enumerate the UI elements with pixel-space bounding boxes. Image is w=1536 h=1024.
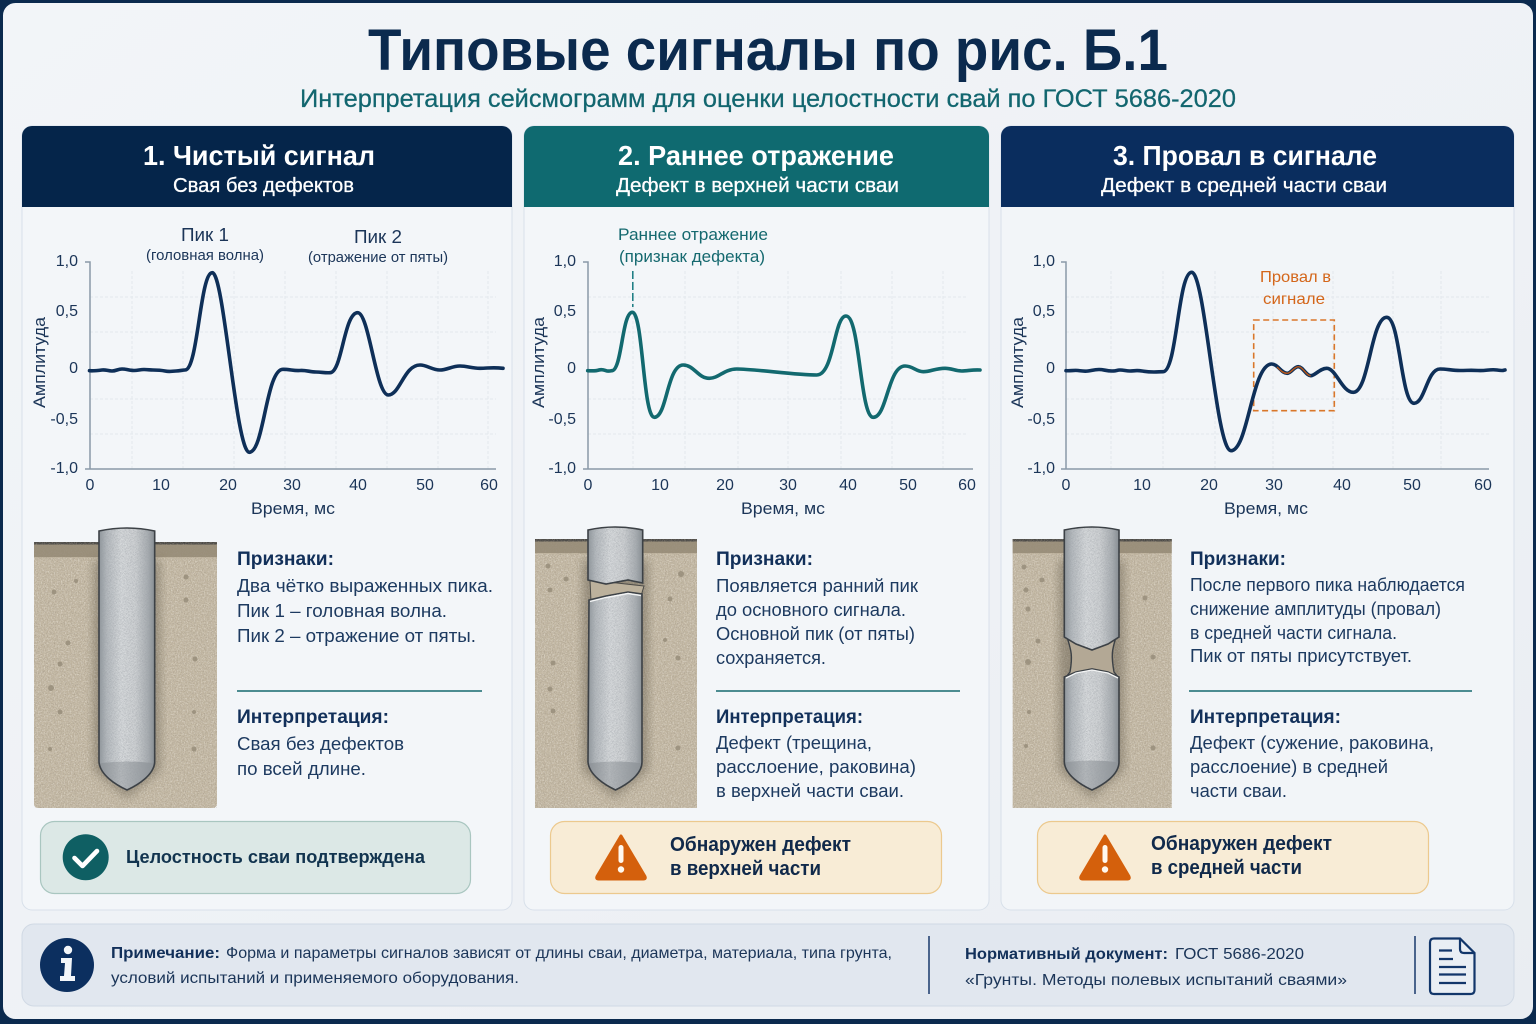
text: interpretation: [1190, 707, 1434, 801]
text: signs: до основного сигнала.: [716, 600, 906, 620]
panel 2 header: 2. Раннее отражение: [618, 140, 894, 171]
panel: 3 signal dip: [1001, 126, 1514, 910]
normative document text: ГОСТ 5686-2020: [1175, 946, 1304, 963]
chart: signal dip seismogram: Провал в: [1260, 269, 1331, 286]
note text: Форма и параметры сигналов зависят от длины сваи, диаметра, материала, типа грунта,: [226, 945, 892, 962]
panel 2 header: Дефект в верхней части сваи: [616, 175, 899, 197]
text: interpretation: Интерпретация:: [716, 707, 863, 728]
status: defect in middle part: в средней части: [1151, 857, 1302, 879]
chart: signal dip seismogram: 1,0: [1033, 253, 1055, 270]
chart: early reflection seismogram: 30: [779, 477, 797, 494]
chart: clean signal seismogram: Пик 2: [354, 227, 402, 247]
status: defect in middle part: Обнаружен дефект: [1151, 833, 1332, 855]
icon: check mark: [63, 834, 109, 880]
icon: warning: [1081, 836, 1129, 879]
illustration: pile with crack in upper part: [535, 524, 697, 808]
panel: 1 clean signal: [22, 126, 512, 910]
text: signs: Два чётко выраженных пика.: [237, 576, 493, 596]
chart: clean signal seismogram: -1,0: [50, 460, 78, 477]
chart: clean signal seismogram: 50: [416, 477, 434, 494]
chart: early reflection seismogram: [529, 226, 980, 518]
text: interpretation: по всей длине.: [237, 759, 366, 779]
text: signs: [237, 549, 493, 646]
chart: clean signal seismogram: 10: [152, 477, 170, 494]
panel 1 header: [22, 126, 512, 207]
chart: clean signal seismogram: 0: [69, 360, 78, 377]
note text: Примечание:: [111, 945, 220, 962]
panel 3 header: Дефект в средней части сваи: [1101, 175, 1387, 197]
chart: signal dip seismogram: 40: [1333, 477, 1351, 494]
chart: signal dip seismogram: 0: [1046, 360, 1055, 377]
chart: signal dip seismogram: 10: [1133, 477, 1151, 494]
text: signs: Признаки:: [1190, 549, 1286, 570]
text: signs: Пик 1 – головная волна.: [237, 601, 447, 621]
text: interpretation: расслоение, раковина): [716, 757, 916, 777]
panel: 2 early reflection: [524, 126, 989, 910]
chart: early reflection seismogram: Амплитуда: [529, 316, 548, 408]
status: defect in upper part: Обнаружен дефект: [670, 834, 851, 856]
chart: clean signal seismogram: (головная волна): [146, 248, 264, 264]
normative document text: Нормативный документ:: [965, 946, 1168, 963]
panel 3 header: 3. Провал в сигнале: [1113, 140, 1377, 171]
chart: clean signal seismogram: 20: [219, 477, 237, 494]
status: defect in upper part: в верхней части: [670, 858, 821, 880]
chart: clean signal seismogram: 0,5: [56, 303, 78, 320]
chart: early reflection seismogram: 40: [839, 477, 857, 494]
chart: clean signal seismogram: Пик 1: [181, 225, 229, 245]
text: interpretation: Дефект (трещина,: [716, 733, 872, 753]
text: interpretation: Свая без дефектов: [237, 734, 404, 754]
chart: clean signal seismogram: (отражение от пяты): [308, 250, 448, 266]
status: defect in upper part: [550, 822, 942, 894]
text: signs: в средней части сигнала.: [1190, 623, 1397, 643]
text: interpretation: Интерпретация:: [1190, 707, 1341, 728]
normative document text: «Грунты. Методы полевых испытаний сваями»: [965, 972, 1347, 989]
chart: clean signal seismogram: 40: [349, 477, 367, 494]
chart: early reflection seismogram: 20: [716, 477, 734, 494]
note text: [111, 945, 892, 987]
chart: signal dip seismogram: Время, мс: [1224, 499, 1309, 518]
chart: clean signal seismogram: Амплитуда: [30, 316, 49, 408]
text: signs: Пик от пяты присутствует.: [1190, 646, 1412, 666]
icon: warning: [597, 836, 645, 879]
chart: early reflection seismogram: 50: [899, 477, 917, 494]
text: signs: Пик 2 – отражение от пяты.: [237, 626, 476, 646]
chart: signal dip seismogram: 0,5: [1033, 303, 1055, 320]
panel 2 header: [524, 126, 989, 207]
chart: early reflection seismogram: 10: [651, 477, 669, 494]
text: interpretation: [716, 707, 916, 801]
icon: document: [1430, 938, 1474, 994]
chart: signal dip seismogram: 30: [1265, 477, 1283, 494]
text: signs: снижение амплитуды (провал): [1190, 599, 1441, 619]
normative document text: [965, 946, 1347, 989]
chart: signal dip seismogram: -1,0: [1027, 460, 1055, 477]
title: Типовые сигналы по рис. Б.1: [368, 18, 1168, 83]
chart: early reflection seismogram: (признак дефекта): [619, 248, 765, 266]
icon: info: [40, 938, 94, 992]
status: integrity confirmed: [40, 822, 470, 894]
text: signs: [1190, 549, 1465, 666]
chart: early reflection seismogram: 0: [567, 360, 576, 377]
chart: signal dip seismogram: сигнале: [1263, 291, 1325, 308]
chart: clean signal seismogram: 60: [480, 477, 498, 494]
chart: early reflection seismogram: 60: [958, 477, 976, 494]
chart: early reflection seismogram: 0: [584, 477, 593, 494]
text: interpretation: в верхней части сваи.: [716, 781, 904, 801]
chart: clean signal seismogram: Время, мс: [251, 499, 336, 518]
text: signs: [716, 549, 918, 668]
text: interpretation: части сваи.: [1190, 781, 1287, 801]
chart: early reflection seismogram: 0,5: [554, 303, 576, 320]
status: integrity confirmed: Целостность сваи подтверждена: [126, 846, 426, 867]
chart: signal dip seismogram: 60: [1474, 477, 1492, 494]
chart: signal dip seismogram: -0,5: [1027, 411, 1055, 428]
text: signs: После первого пика наблюдается: [1190, 575, 1465, 595]
illustration: intact pile in soil: [34, 524, 217, 808]
subtitle: Интерпретация сейсмограмм для оценки целостности свай по ГОСТ 5686-2020: [300, 85, 1236, 113]
text: signs: Появляется ранний пик: [716, 576, 918, 596]
chart: clean signal seismogram: -0,5: [50, 411, 78, 428]
panel 1 header: Свая без дефектов: [173, 175, 354, 197]
chart: early reflection seismogram: Раннее отражение: [618, 226, 768, 244]
panel 1 header: 1. Чистый сигнал: [143, 140, 375, 171]
text: signs: Признаки:: [716, 549, 813, 570]
chart: signal dip seismogram: 20: [1200, 477, 1218, 494]
illustration: pile with necking in middle part: [1013, 524, 1172, 808]
chart: early reflection seismogram: Время, мс: [741, 499, 826, 518]
chart: early reflection seismogram: -1,0: [548, 460, 576, 477]
footer note bar: [22, 924, 1514, 1006]
status: defect in middle part: [1038, 822, 1428, 894]
chart: clean signal seismogram: 30: [283, 477, 301, 494]
chart: signal dip seismogram: 0: [1062, 477, 1071, 494]
chart: clean signal seismogram: 0: [86, 477, 95, 494]
chart: early reflection seismogram: -0,5: [548, 411, 576, 428]
text: interpretation: [237, 707, 404, 779]
text: interpretation: расслоение) в средней: [1190, 757, 1388, 777]
text: interpretation: Дефект (сужение, раковина,: [1190, 733, 1434, 753]
text: interpretation: Интерпретация:: [237, 707, 389, 728]
panel 3 header: [1001, 126, 1514, 207]
chart: early reflection seismogram: 1,0: [554, 253, 576, 270]
chart: clean signal seismogram: [30, 225, 503, 518]
chart: clean signal seismogram: 1,0: [56, 253, 78, 270]
chart: signal dip seismogram: Амплитуда: [1008, 316, 1027, 408]
chart: signal dip seismogram: [1008, 253, 1505, 518]
note text: условий испытаний и применяемого оборудования.: [111, 970, 519, 987]
text: signs: Признаки:: [237, 549, 334, 570]
text: signs: сохраняется.: [716, 648, 826, 668]
chart: signal dip seismogram: 50: [1403, 477, 1421, 494]
text: signs: Основной пик (от пяты): [716, 624, 915, 644]
